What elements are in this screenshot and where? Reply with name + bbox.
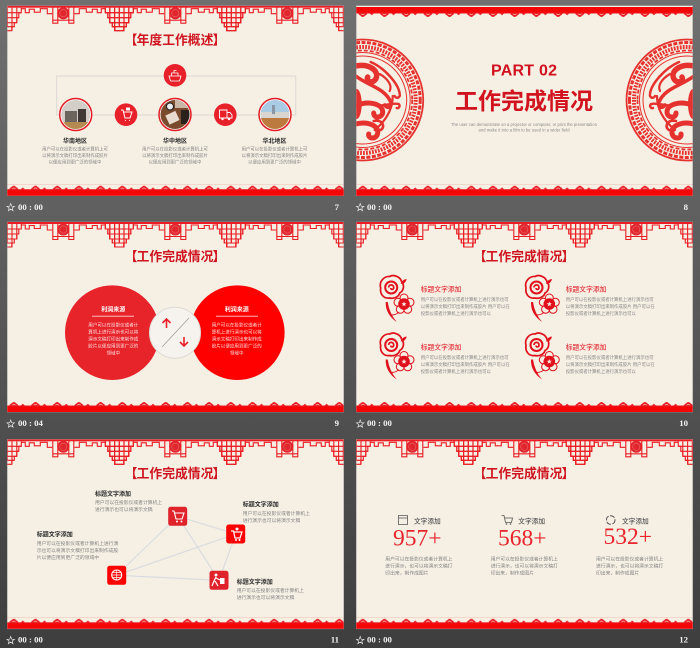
footer slide 8: 8 (684, 202, 689, 212)
panel: slide 8 section divider (356, 5, 693, 196)
icon node: globe (107, 566, 126, 585)
text block bottom: 标题文字添加 (237, 578, 273, 586)
slide 8 paper (356, 6, 693, 196)
icon node: shopper (226, 524, 245, 544)
region text south (42, 137, 109, 165)
part label: PART 02 (491, 62, 557, 80)
stat 568: 进行演示，也可以将演示文稿打 (491, 562, 558, 569)
section subtitle: and make it into a film to be used in a wider field (478, 128, 570, 132)
slide 7 top lattice border (0, 6, 357, 31)
slide 7 paper (7, 6, 344, 196)
slide 11 paper (7, 439, 344, 629)
region text central: 用户可以在投影仪或者计算机上可 (142, 146, 209, 153)
text bottom left: 以将演示文稿打印出来制作成胶片 用户可以在 (421, 361, 510, 368)
icon: flower top right (526, 276, 559, 322)
left paper-cut medallion (356, 38, 424, 162)
stat 957: 用户可以在投影仪或者计算机上 (385, 555, 453, 562)
slide 9 title: 【工作完成情况】 (125, 249, 225, 264)
footer slide 12: 12 (679, 635, 689, 645)
text block right (243, 501, 310, 524)
region text north: 华北地区 (262, 137, 287, 145)
icon: flower bottom right (526, 333, 559, 380)
footer slide 11: 00 : 00 (18, 635, 44, 645)
footer slide 9: 9 (335, 418, 340, 428)
section subtitle: The user can demonstrate on a projector or computer, or print the presentation (451, 122, 598, 127)
region text north (242, 137, 308, 165)
right circle (190, 285, 285, 380)
region text central: 以便应用到更广泛的领域中 (149, 158, 201, 165)
slide 12 top lattice border (342, 439, 700, 464)
stat 957: 957+ (393, 525, 442, 551)
slide 12 title: 【工作完成情况】 (474, 466, 574, 481)
text block right: 进行演示也可以将演示文稿 (243, 517, 300, 524)
slide 11 bottom border (7, 618, 344, 629)
slide 8 bottom border (356, 185, 693, 196)
stat 532: 用户可以在投影仪或者计算机上 (596, 555, 663, 562)
region text south: 用户可以在投影仪或者计算机上可 (42, 146, 109, 153)
slide 10 bottom border (356, 401, 693, 412)
panel: slide 12 statistics (342, 439, 700, 629)
slide 11 title: 【工作完成情况】 (125, 466, 225, 481)
right circle text: 演示文稿打印出来制作成 (212, 336, 262, 342)
right circle text: 利润来源 (225, 306, 249, 314)
slide 12 paper (356, 439, 693, 629)
right circle text: 用户可以在投影仪或者计 (212, 321, 262, 328)
slide 10 title: 【工作完成情况】 (474, 249, 574, 264)
text block bottom (237, 578, 304, 601)
region text central: 以将演示文稿打印出来制作成胶片 (142, 152, 208, 159)
footer slide 9: 00 : 04 (18, 418, 44, 428)
text bottom left: 标题文字添加 (421, 342, 462, 352)
network lines (117, 516, 236, 580)
text bottom right: 投影仪或者计算机上进行演示也可以 (566, 368, 637, 375)
section subtitle (451, 122, 598, 132)
slide 11 top lattice border (0, 439, 357, 464)
text block right: 标题文字添加 (243, 501, 279, 509)
text bottom right (566, 342, 655, 375)
icon node: person (210, 571, 228, 590)
footer slide 11 (7, 635, 339, 645)
left circle text: 利润来源 (101, 306, 125, 314)
stat 957: 文字添加 (414, 516, 441, 526)
right circle text: 领域中 (230, 350, 244, 357)
footer slide 8: 00 : 00 (367, 202, 393, 212)
text block top (95, 490, 162, 513)
text block left (37, 531, 118, 561)
right circle text (212, 306, 262, 357)
slide 12 bottom border (356, 618, 693, 629)
footer slide 9 (7, 418, 340, 428)
icon node: cart (168, 507, 187, 526)
center circle with arrows (150, 307, 200, 358)
text block left: 示也可以将演示文稿打印出来制作成胶 (37, 547, 118, 554)
text bottom left (421, 342, 510, 375)
stat 568 (491, 516, 558, 576)
slide 9 bottom border (7, 401, 344, 412)
panel: slide 11 network (0, 439, 357, 629)
left circle text: 用户可以在投影仪或者计 (88, 321, 139, 328)
left circle text (88, 306, 139, 357)
region text south: 华南地区 (63, 137, 87, 145)
text block left: 片以便应用到更广泛的领域中 (37, 554, 99, 561)
text block top: 标题文字添加 (95, 490, 131, 498)
icon: cart circle (115, 103, 137, 126)
region text north: 以便应用到更广泛的领域中 (248, 158, 301, 165)
text top left: 以将演示文稿打印出来制作成胶片 用户可以在 (421, 303, 510, 310)
panel: slide 10 flowers (342, 222, 700, 412)
region text north: 以将演示文稿打印出来制作成胶片 (242, 152, 307, 159)
stat 532: 进行演示，也可以将演示文稿打 (596, 562, 663, 569)
footer slide 12: 00 : 00 (367, 635, 393, 645)
text top left: 投影仪或者计算机上进行演示也可以 (421, 310, 492, 317)
slide 9 top lattice border (0, 222, 357, 247)
stat 532: 印出来，制作成图片 (596, 569, 639, 576)
stat 532 (596, 516, 663, 576)
left circle text: 演示文稿打印出来制作成 (88, 336, 139, 342)
right circle text: 胶片以便应用到更广泛的 (212, 343, 262, 350)
icon: flower bottom left (380, 333, 414, 380)
text bottom right: 用户可以在投影仪或者计算机上进行演示也可 (566, 354, 654, 361)
text top right (566, 284, 655, 317)
text top left: 标题文字添加 (421, 284, 462, 294)
footer slide 10: 10 (679, 418, 689, 428)
text bottom right: 以将演示文稿打印出来制作成胶片 用户可以在 (566, 361, 655, 368)
stat 568: 568+ (498, 525, 547, 551)
stat 957: 进行演示，也可以将演示文稿打 (385, 562, 453, 569)
text bottom left: 用户可以在投影仪或者计算机上进行演示也可 (421, 354, 509, 361)
text block left: 用户可以在投影仪或者计算机上进行演 (37, 540, 118, 547)
left circle text: 算机上进行演示也可以将 (88, 328, 139, 336)
photo: office (60, 98, 92, 130)
region text south: 以便应用到更广泛的领域中 (49, 158, 101, 165)
footer slide 7: 7 (335, 202, 340, 212)
icon: flower top left (380, 276, 414, 322)
slide 8 top border (356, 7, 693, 18)
connector frame (57, 76, 296, 115)
region text south: 以将演示文稿打印出来制作成胶片 (42, 152, 108, 159)
text top left (421, 284, 510, 317)
slide 9 paper (7, 222, 344, 412)
text block top: 进行演示也可以将演示文稿 (95, 506, 153, 513)
stat 568: 印出来，制作成图片 (491, 569, 534, 576)
text block left: 标题文字添加 (37, 531, 73, 539)
text block top: 用户可以在投影仪或者计算机上 (95, 499, 162, 506)
region text central: 华中地区 (163, 137, 187, 145)
text top right: 用户可以在投影仪或者计算机上进行演示也可 (566, 296, 654, 303)
slide 7 title: 【年度工作概述】 (125, 32, 225, 48)
text top right: 标题文字添加 (566, 284, 607, 294)
stat 532: 文字添加 (622, 516, 649, 526)
footer slide 10: 00 : 00 (367, 418, 393, 428)
slide 10 paper (356, 222, 693, 412)
footer slide 8 (356, 202, 689, 212)
footer slide 7 (7, 202, 340, 212)
footer slide 10 (356, 418, 689, 428)
region text north: 用户可以在投影仪或者计算机上可 (242, 146, 308, 153)
right paper-cut medallion (626, 40, 700, 160)
icon: truck (214, 103, 237, 126)
footer slide 11: 11 (331, 635, 339, 645)
text block bottom: 用户可以在投影仪或者计算机上 (237, 587, 304, 594)
text block right: 用户可以在投影仪或者计算机上 (243, 510, 310, 517)
text bottom right: 标题文字添加 (566, 342, 607, 352)
text bottom left: 投影仪或者计算机上进行演示也可以 (421, 368, 492, 375)
region text central (142, 137, 209, 165)
text top right: 以将演示文稿打印出来制作成胶片 用户可以在 (566, 303, 655, 310)
text top right: 投影仪或者计算机上进行演示也可以 (566, 310, 637, 317)
text top left: 用户可以在投影仪或者计算机上进行演示也可 (421, 296, 509, 303)
stat 568: 文字添加 (518, 516, 545, 526)
text block bottom: 进行演示也可以将演示文稿 (237, 594, 294, 601)
stat 568: 用户可以在投影仪或者计算机上 (491, 555, 558, 562)
section title: 工作完成情况 (455, 88, 593, 114)
icon: ship (164, 64, 186, 87)
stat 532: 532+ (604, 524, 652, 550)
panel: slide 7 annual overview (0, 6, 357, 196)
slide 10 top lattice border (342, 222, 700, 247)
stat 957 (385, 516, 453, 576)
slide 7 bottom border (7, 185, 344, 196)
left circle text: 胶片以便应用到更广泛的 (88, 343, 139, 350)
panel: slide 9 profit sources (0, 222, 357, 412)
photo: building (259, 98, 291, 130)
left circle (65, 285, 160, 380)
stat 957: 印出来，制作成图片 (385, 569, 429, 576)
right circle text: 算机上进行演示也可以将 (212, 328, 262, 336)
footer slide 12 (356, 635, 689, 645)
photo: desk (159, 98, 191, 130)
footer slide 7: 00 : 00 (18, 202, 44, 212)
left circle text: 领域中 (106, 350, 121, 357)
